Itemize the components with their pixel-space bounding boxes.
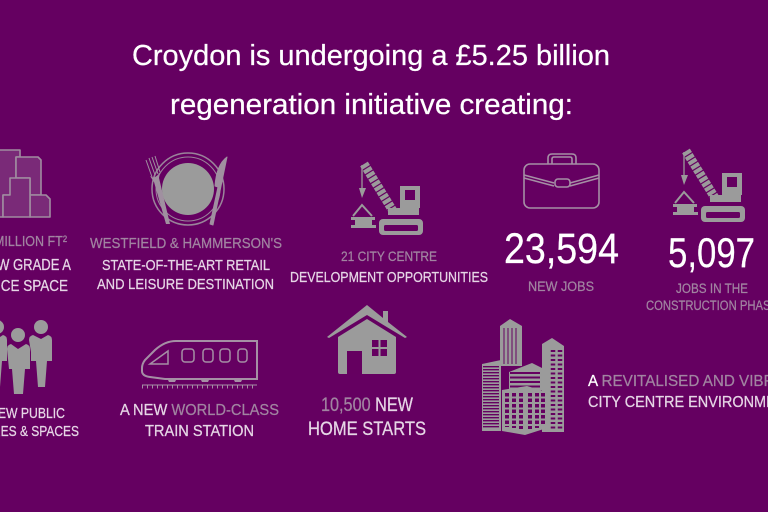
text: retail description [97, 257, 274, 293]
text: revitalised environment [588, 373, 768, 411]
panel: construction jobs [646, 151, 768, 313]
text: construction jobs label [646, 281, 768, 313]
panel: retail and leisure [90, 153, 282, 293]
icon: plate with fork and knife [146, 153, 227, 225]
panel: new homes [308, 305, 426, 440]
text: new jobs label: NEW JOBS [528, 279, 594, 294]
panel: train station [120, 341, 279, 440]
text: retail description: AND LEISURE DESTINATION [97, 276, 274, 293]
text: train station: A NEW WORLD-CLASS [120, 402, 279, 419]
text: public squares [0, 405, 79, 440]
text: home starts [308, 395, 426, 440]
icon: house [327, 305, 407, 374]
icon: briefcase [524, 154, 599, 208]
title: regeneration initiative creating: [170, 89, 573, 121]
icon: people [0, 320, 52, 394]
text: retail description: STATE-OF-THE-ART RETAIL [102, 257, 270, 274]
text: train station: TRAIN STATION [145, 423, 254, 440]
text: home starts: HOME STARTS [308, 419, 426, 440]
text: development opportunities: DEVELOPMENT OPPORTUNITIES [290, 269, 488, 286]
icon: office buildings [0, 150, 50, 217]
text: city centre count: 21 CITY CENTRE [341, 248, 437, 264]
icon: crane [351, 164, 423, 235]
icon: crane [673, 151, 745, 222]
stat: 23,594: 23,594 [504, 225, 619, 273]
panel: public squares [0, 320, 79, 440]
text: office description [0, 257, 71, 295]
text: construction jobs label: JOBS IN THE [676, 281, 748, 296]
panel: city centre environment [482, 319, 768, 435]
title [132, 40, 610, 121]
text: home starts: 10,500 NEW [321, 395, 413, 416]
icon: city buildings [482, 319, 564, 435]
text: developers: WESTFIELD & HAMMERSON'S [90, 236, 282, 252]
text: train station [120, 402, 279, 440]
title: Croydon is undergoing a £5.25 billion [132, 40, 610, 72]
panel: new jobs [504, 154, 619, 294]
panel: development opportunities [290, 164, 488, 286]
icon: train [142, 341, 257, 387]
panel: office space [0, 150, 71, 295]
